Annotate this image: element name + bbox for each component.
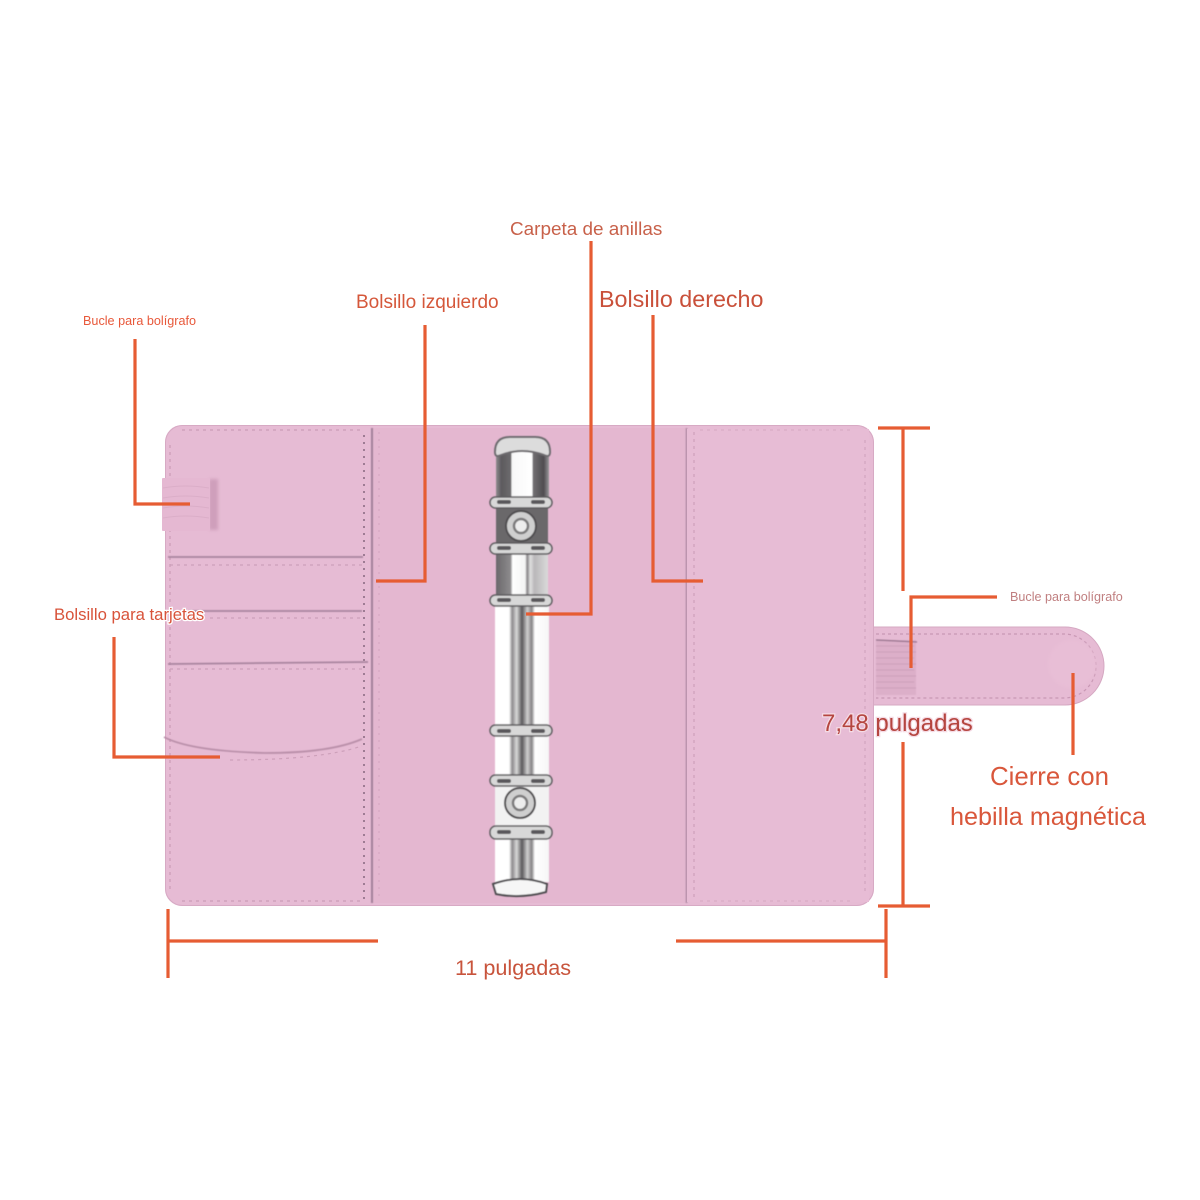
label: pen loop right: Bucle para bolígrafo xyxy=(1010,590,1123,604)
leader: right pocket xyxy=(653,315,703,581)
card pockets xyxy=(164,557,368,760)
right pocket xyxy=(687,429,869,902)
left pen loop xyxy=(162,478,218,531)
leader: ring binder xyxy=(526,241,591,614)
rivets xyxy=(506,511,536,541)
leader: strap pen loop xyxy=(911,597,997,668)
bottom cap xyxy=(493,879,547,896)
width dimension xyxy=(168,909,886,978)
label: carpeta de anillas: Carpeta de anillas xyxy=(510,219,662,240)
leader lines xyxy=(114,241,1073,757)
label: bolsillo derecho: Bolsillo derecho xyxy=(599,286,763,312)
leader: card pocket xyxy=(114,637,220,757)
height dimension xyxy=(878,428,930,906)
label: bolsillo izquierdo: Bolsillo izquierdo xyxy=(356,292,499,313)
label: pen loop left: Bucle para bolígrafo xyxy=(83,314,196,328)
leader: left pocket xyxy=(376,325,425,581)
label: magnetic clasp: hebilla magnética xyxy=(950,803,1147,831)
elastic pen loop on strap xyxy=(876,640,917,695)
clasp strap xyxy=(872,627,1104,705)
label: magnetic clasp xyxy=(950,763,1147,831)
center panel xyxy=(364,428,687,903)
leader: magnetic clasp xyxy=(1071,673,1075,755)
leader: left pen loop xyxy=(135,339,190,504)
ring mechanism xyxy=(490,437,552,896)
label: width: 11 pulgadas xyxy=(455,955,571,980)
rings xyxy=(490,497,552,839)
label: magnetic clasp: Cierre con xyxy=(990,763,1109,791)
label: height: 7,48 pulgadas xyxy=(822,710,973,737)
binder cover xyxy=(162,425,874,906)
label: card pocket: Bolsillo para tarjetas xyxy=(54,605,204,624)
magnetic snap bump xyxy=(1048,640,1096,688)
top cap xyxy=(495,437,550,456)
